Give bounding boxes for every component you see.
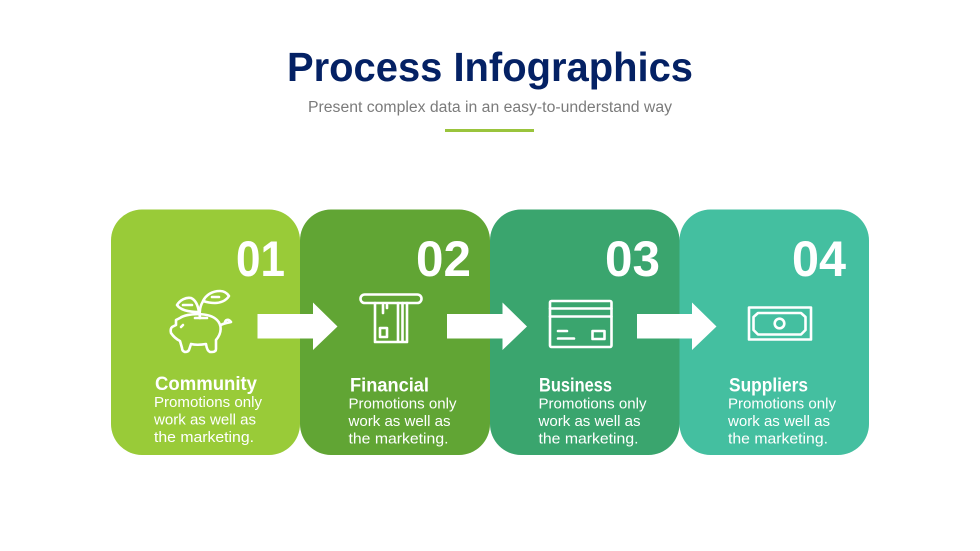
panel: 02 financial: the marketing. (348, 430, 448, 448)
number 02: 02 (416, 231, 471, 287)
panel: 04 suppliers: the marketing. (728, 430, 828, 448)
panel: 02 financial: Promotions only (348, 396, 457, 412)
title accent rule (445, 129, 534, 132)
number 01: 01 (236, 231, 285, 287)
text: community: Community (155, 374, 257, 395)
text: financial: Financial (350, 376, 429, 396)
number 03: 03 (605, 231, 660, 287)
panel: 04 suppliers: work as well as (727, 413, 830, 430)
icon: card in atm slot (360, 294, 422, 342)
icon: banknote (749, 308, 811, 340)
icon: piggy bank with sprout (171, 291, 231, 352)
number 04: 04 (792, 231, 846, 287)
panel: 03 business: Promotions only (538, 396, 647, 412)
panel: 03 business: work as well as (537, 413, 640, 430)
arrow 2 (447, 302, 527, 350)
icon: credit card (550, 301, 612, 347)
panel: 04 suppliers: Promotions only (728, 396, 836, 412)
arrow 3 (637, 302, 716, 350)
panel: 01 community: the marketing. (154, 429, 254, 446)
arrow 1 (258, 302, 338, 350)
subtitle: Present complex data in an easy-to-understand way (308, 99, 672, 116)
title: Process Infographics (287, 44, 693, 90)
text: suppliers: Suppliers (729, 376, 808, 396)
panel: 03 business: the marketing. (538, 430, 638, 448)
panel: 02 financial: work as well as (347, 413, 450, 430)
panel: 04 suppliers (680, 210, 869, 455)
panel: 03 business (490, 210, 680, 455)
panel: 01 community: Promotions only (154, 394, 262, 411)
panel: 02 financial (300, 210, 490, 455)
panel: 01 community: work as well as (153, 412, 256, 428)
text: business: Business (539, 376, 612, 396)
panel: 01 community (111, 210, 300, 455)
